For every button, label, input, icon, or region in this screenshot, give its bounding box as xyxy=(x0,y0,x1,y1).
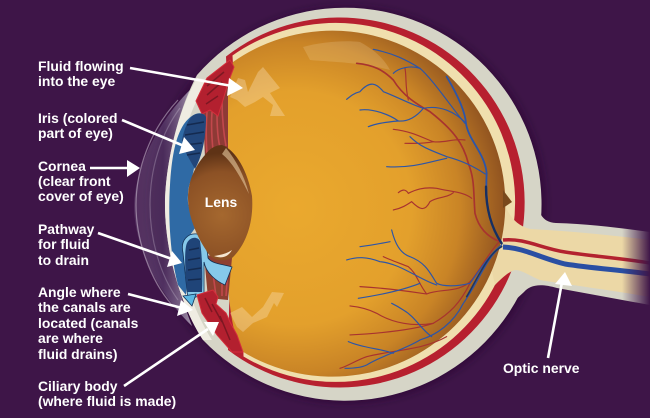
arrow: angle xyxy=(128,294,193,316)
label: angle: located (canals xyxy=(38,315,139,331)
label: angle: fluid drains) xyxy=(38,346,118,362)
fluid arrow: upper xyxy=(230,67,285,116)
lower lens highlight xyxy=(214,250,232,257)
label: iris xyxy=(38,110,118,141)
dark trunk xyxy=(486,187,502,243)
veins xyxy=(345,49,502,368)
arrow: optic nerve xyxy=(548,272,572,358)
label: cornea: (clear front xyxy=(38,173,111,189)
label: pathway: to drain xyxy=(38,252,89,268)
label: angle: Angle where xyxy=(38,284,121,300)
label: pathway: Pathway xyxy=(38,221,95,237)
label: ciliary body xyxy=(38,378,176,409)
label: iris: part of eye) xyxy=(38,125,113,141)
fluid arrow: lower xyxy=(230,292,284,332)
label: cornea: cover of eye) xyxy=(38,188,124,204)
vessel: optic artery xyxy=(503,240,650,263)
lens highlight xyxy=(222,148,249,194)
label: angle xyxy=(38,284,139,362)
vessel: optic vein xyxy=(503,247,650,274)
arrow: cornea xyxy=(90,160,140,177)
label: fluid flowing: Fluid flowing xyxy=(38,58,124,74)
arrow: iris xyxy=(122,120,195,154)
upper zonule fibers xyxy=(203,85,228,158)
label: optic nerve: Optic nerve xyxy=(503,360,580,376)
arrow: ciliary body xyxy=(124,322,219,386)
label: cornea: Cornea xyxy=(38,158,86,174)
label: angle: the canals are xyxy=(38,299,131,315)
label: lens: Lens xyxy=(205,194,237,210)
sclera with optic nerve sheath xyxy=(165,8,650,401)
nerve fade xyxy=(622,225,650,310)
cream retina layer xyxy=(232,23,515,382)
label: ciliary body: Ciliary body xyxy=(38,378,118,394)
highlight: upper vitreous xyxy=(303,41,390,70)
red choroid layer xyxy=(226,17,525,387)
lower ciliary body xyxy=(197,290,243,352)
optic nerve fibers xyxy=(486,205,650,297)
arrow: fluid flowing xyxy=(130,68,243,96)
label: ciliary body: (where fluid is made) xyxy=(38,393,176,409)
label: angle: are where xyxy=(38,330,103,346)
lower zonule fibers xyxy=(204,255,232,300)
upper ciliary body xyxy=(196,60,234,116)
vitreous: orange interior xyxy=(226,31,505,377)
iris: colored part of eye xyxy=(169,113,206,295)
arrow: pathway xyxy=(98,233,182,267)
label: fluid flowing xyxy=(38,58,124,89)
label: pathway xyxy=(38,221,95,268)
eye shadow xyxy=(149,7,545,403)
cornea: clear front cover xyxy=(134,88,192,326)
arteries xyxy=(340,63,500,368)
label: fluid flowing: into the eye xyxy=(38,73,115,89)
lower iris with drainage pathway xyxy=(182,234,232,306)
lens xyxy=(188,145,252,260)
label: cornea xyxy=(38,158,124,204)
label: iris: Iris (colored xyxy=(38,110,118,126)
optic disc notch xyxy=(503,190,512,208)
label: pathway: for fluid xyxy=(38,236,90,252)
retinal blood vessels xyxy=(340,49,502,368)
